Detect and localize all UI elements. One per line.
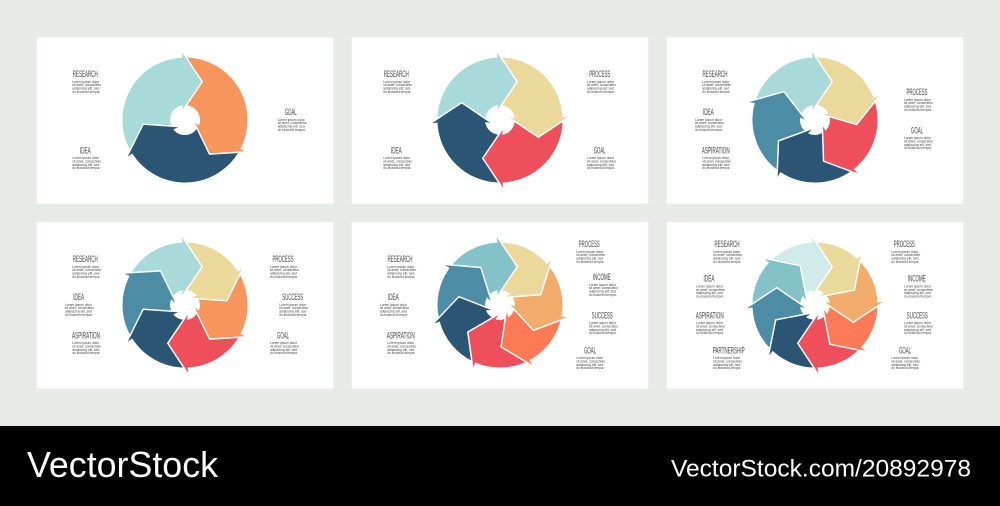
text block: research: Lorem ipsum dolor: [387, 265, 415, 269]
text block: goal: do eiusmod tempor.: [278, 128, 306, 132]
text block: aspiration: Lorem ipsum dolor: [696, 321, 724, 325]
text block: research: RESEARCH: [73, 69, 98, 79]
text block: research: do eiusmod tempor.: [383, 90, 411, 94]
text block: aspiration: ASPIRATION: [696, 310, 724, 320]
text block: process: sit amet, consectetur: [587, 83, 617, 87]
panel: six-step cycle: [37, 222, 333, 388]
text block: idea: sit amet, consectetur: [383, 160, 413, 164]
text block: success: adipiscing elit, sed: [904, 328, 931, 332]
text block: goal: adipiscing elit, sed: [270, 348, 297, 352]
text block: idea: adipiscing elit, sed: [696, 291, 723, 295]
text block: income: Lorem ipsum dolor: [589, 283, 617, 287]
text block: goal: do eiusmod tempor.: [270, 351, 298, 355]
text block: income: INCOME: [908, 274, 926, 284]
text block: aspiration: [387, 330, 417, 355]
text block: process: do eiusmod tempor.: [904, 108, 932, 112]
text block: success: do eiusmod tempor.: [279, 313, 307, 317]
text block: research: do eiusmod tempor.: [713, 260, 741, 264]
text block: aspiration: ASPIRATION: [387, 330, 415, 340]
text block: partnership: do eiusmod tempor.: [713, 366, 741, 370]
text block: process: [904, 87, 934, 112]
text block: aspiration: adipiscing elit, sed: [702, 163, 729, 167]
text block: research: sit amet, consectetur: [713, 253, 743, 257]
text block: idea: IDEA: [704, 274, 714, 284]
text block: aspiration: ASPIRATION: [72, 330, 100, 340]
text block: process: adipiscing elit, sed: [904, 104, 931, 108]
text block: goal: [587, 145, 617, 170]
text block: aspiration: do eiusmod tempor.: [702, 166, 730, 170]
text block: idea: adipiscing elit, sed: [72, 163, 99, 167]
panel: eight-step cycle: [667, 222, 963, 388]
text block: goal: adipiscing elit, sed: [904, 143, 931, 147]
text block: income: [589, 272, 619, 297]
text block: income: do eiusmod tempor.: [589, 293, 617, 297]
text block: goal: GOAL: [277, 330, 289, 340]
footer image id: VectorStock.com/20892978: [671, 456, 971, 482]
text block: aspiration: adipiscing elit, sed: [72, 348, 99, 352]
text block: process: Lorem ipsum dolor: [270, 265, 298, 269]
text block: success: SUCCESS: [592, 310, 613, 320]
text block: goal: adipiscing elit, sed: [587, 163, 614, 167]
text block: process: do eiusmod tempor.: [270, 275, 298, 279]
text block: aspiration: [696, 310, 726, 335]
text block: idea: [72, 145, 102, 170]
text block: goal: do eiusmod tempor.: [576, 366, 604, 370]
footer bar: [0, 426, 1000, 506]
text block: idea: IDEA: [391, 145, 402, 155]
text block: success: sit amet, consectetur: [589, 324, 619, 328]
text block: process: Lorem ipsum dolor: [891, 250, 919, 254]
text block: goal: Lorem ipsum dolor: [278, 118, 305, 122]
text block: aspiration: sit amet, consectetur: [72, 344, 102, 348]
text block: process: [270, 254, 300, 279]
text block: idea: [383, 145, 413, 170]
text block: process: Lorem ipsum dolor: [587, 80, 615, 84]
text block: research: [72, 254, 102, 279]
text block: aspiration: adipiscing elit, sed: [387, 348, 414, 352]
text block: goal: sit amet, consectetur: [278, 121, 307, 125]
text block: idea: Lorem ipsum dolor: [695, 118, 723, 122]
text block: aspiration: [72, 330, 102, 355]
text block: goal: sit amet, consectetur: [587, 160, 617, 164]
text block: research: [702, 69, 732, 94]
text block: success: sit amet, consectetur: [279, 306, 309, 310]
text block: goal: adipiscing elit, sed: [278, 124, 305, 128]
text block: goal: do eiusmod tempor.: [587, 166, 615, 170]
text block: research: RESEARCH: [384, 69, 409, 79]
text block: income: adipiscing elit, sed: [589, 290, 616, 294]
panel: five-step cycle: [667, 37, 963, 213]
text block: goal: Lorem ipsum dolor: [904, 136, 932, 140]
text block: aspiration: do eiusmod tempor.: [72, 351, 100, 355]
text block: income: do eiusmod tempor.: [904, 295, 932, 299]
text block: partnership: PARTNERSHIP: [713, 345, 745, 355]
text block: idea: adipiscing elit, sed: [383, 163, 410, 167]
text block: research: Lorem ipsum dolor: [383, 80, 411, 84]
text block: research: Lorem ipsum dolor: [72, 80, 100, 84]
text block: idea: Lorem ipsum dolor: [696, 285, 724, 289]
text block: success: [279, 292, 309, 317]
text block: income: [904, 274, 934, 299]
text block: goal: do eiusmod tempor.: [904, 146, 932, 150]
text block: idea: do eiusmod tempor.: [72, 166, 100, 170]
text block: goal: Lorem ipsum dolor: [891, 356, 919, 360]
text block: process: sit amet, consectetur: [904, 101, 934, 105]
text block: idea: [695, 107, 725, 132]
chart: six arrow cycle: [96, 222, 274, 388]
text block: goal: [576, 345, 606, 370]
text block: goal: sit amet, consectetur: [270, 344, 300, 348]
text block: process: adipiscing elit, sed: [576, 256, 603, 260]
text block: goal: GOAL: [285, 107, 297, 117]
text block: goal: sit amet, consectetur: [904, 140, 934, 144]
text block: process: adipiscing elit, sed: [891, 256, 918, 260]
text block: goal: [891, 345, 921, 370]
text block: process: adipiscing elit, sed: [587, 86, 614, 90]
text block: research: sit amet, consectetur: [702, 83, 732, 87]
text block: research: [72, 69, 102, 94]
text block: goal: sit amet, consectetur: [891, 360, 921, 364]
text block: income: sit amet, consectetur: [904, 288, 934, 292]
text block: goal: [904, 125, 934, 150]
text block: process: PROCESS: [589, 69, 610, 79]
text block: success: Lorem ipsum dolor: [904, 321, 932, 325]
text block: process: sit amet, consectetur: [576, 253, 606, 257]
panel: three-step cycle: [37, 37, 333, 210]
text block: aspiration: sit amet, consectetur: [387, 344, 417, 348]
text block: idea: sit amet, consectetur: [695, 121, 725, 125]
text block: income: Lorem ipsum dolor: [904, 285, 932, 289]
text block: goal: Lorem ipsum dolor: [576, 356, 604, 360]
text block: process: do eiusmod tempor.: [587, 90, 615, 94]
text block: research: RESEARCH: [73, 254, 98, 264]
text block: partnership: sit amet, consectetur: [713, 360, 743, 364]
text block: process: adipiscing elit, sed: [270, 272, 297, 276]
text block: idea: Lorem ipsum dolor: [72, 156, 100, 160]
text block: research: RESEARCH: [702, 69, 728, 79]
text block: idea: Lorem ipsum dolor: [65, 303, 93, 307]
text block: process: PROCESS: [906, 87, 928, 97]
text block: idea: do eiusmod tempor.: [380, 313, 408, 317]
text block: idea: IDEA: [703, 107, 714, 117]
text block: success: [904, 310, 934, 335]
text block: research: adipiscing elit, sed: [383, 86, 410, 90]
text block: goal: [278, 107, 307, 132]
text block: success: Lorem ipsum dolor: [589, 321, 617, 325]
text block: idea: Lorem ipsum dolor: [383, 156, 411, 160]
text block: goal: do eiusmod tempor.: [891, 366, 919, 370]
text block: idea: adipiscing elit, sed: [695, 124, 722, 128]
text block: process: sit amet, consectetur: [270, 268, 300, 272]
text block: process: PROCESS: [579, 239, 600, 249]
panel: four-step cycle: [352, 37, 648, 204]
text block: research: RESEARCH: [388, 254, 412, 264]
text block: success: SUCCESS: [907, 310, 928, 320]
text block: success: sit amet, consectetur: [904, 324, 934, 328]
text block: partnership: [713, 345, 745, 370]
text block: research: do eiusmod tempor.: [72, 275, 100, 279]
text block: idea: adipiscing elit, sed: [65, 310, 92, 314]
text block: success: do eiusmod tempor.: [589, 331, 617, 335]
text block: research: adipiscing elit, sed: [72, 272, 99, 276]
text block: income: sit amet, consectetur: [589, 286, 619, 290]
text block: research: [713, 239, 743, 264]
text block: aspiration: do eiusmod tempor.: [387, 351, 415, 355]
text block: aspiration: sit amet, consectetur: [702, 160, 732, 164]
text block: process: Lorem ipsum dolor: [576, 250, 604, 254]
text block: aspiration: Lorem ipsum dolor: [387, 341, 415, 345]
text block: research: adipiscing elit, sed: [387, 272, 414, 276]
text block: goal: sit amet, consectetur: [576, 360, 606, 364]
text block: aspiration: sit amet, consectetur: [696, 324, 726, 328]
text block: process: do eiusmod tempor.: [576, 260, 604, 264]
chart: eight arrow cycle: [734, 224, 896, 386]
text block: idea: sit amet, consectetur: [72, 160, 102, 164]
text block: idea: IDEA: [388, 292, 399, 302]
text block: research: [387, 254, 417, 279]
text block: research: Lorem ipsum dolor: [702, 80, 730, 84]
text block: idea: [65, 292, 95, 317]
text block: research: adipiscing elit, sed: [702, 86, 729, 90]
text block: success: SUCCESS: [282, 292, 303, 302]
text block: research: sit amet, consectetur: [72, 83, 102, 87]
text block: aspiration: Lorem ipsum dolor: [702, 156, 730, 160]
text block: goal: GOAL: [911, 125, 923, 135]
text block: idea: sit amet, consectetur: [65, 306, 95, 310]
text block: aspiration: adipiscing elit, sed: [696, 328, 723, 332]
chart: three arrow cycle: [115, 49, 278, 210]
text block: research: sit amet, consectetur: [387, 268, 417, 272]
text block: process: [891, 239, 921, 264]
text block: research: RESEARCH: [714, 239, 740, 249]
text block: income: INCOME: [593, 272, 611, 282]
text block: goal: GOAL: [899, 345, 911, 355]
text block: partnership: Lorem ipsum dolor: [713, 356, 741, 360]
text block: idea: do eiusmod tempor.: [695, 128, 723, 132]
text block: research: [383, 69, 413, 94]
text block: process: do eiusmod tempor.: [891, 260, 919, 264]
chart: four arrow cycle: [429, 49, 571, 191]
text block: research: Lorem ipsum dolor: [713, 250, 741, 254]
text block: idea: [380, 292, 410, 317]
text block: success: adipiscing elit, sed: [279, 310, 306, 314]
chart: seven arrow cycle: [414, 222, 580, 390]
text block: process: sit amet, consectetur: [891, 253, 921, 257]
text block: goal: Lorem ipsum dolor: [270, 341, 298, 345]
text block: goal: GOAL: [594, 145, 606, 155]
text block: research: do eiusmod tempor.: [72, 90, 100, 94]
text block: idea: IDEA: [73, 292, 84, 302]
text block: aspiration: do eiusmod tempor.: [696, 331, 724, 335]
text block: idea: do eiusmod tempor.: [696, 295, 724, 299]
text block: process: [576, 239, 606, 264]
text block: idea: adipiscing elit, sed: [380, 310, 407, 314]
text block: process: PROCESS: [272, 254, 294, 264]
text block: idea: do eiusmod tempor.: [65, 313, 93, 317]
text block: goal: adipiscing elit, sed: [576, 363, 603, 367]
text block: research: do eiusmod tempor.: [702, 90, 730, 94]
text block: idea: sit amet, consectetur: [380, 306, 410, 310]
text block: success: Lorem ipsum dolor: [279, 303, 307, 307]
text block: goal: Lorem ipsum dolor: [587, 156, 615, 160]
text block: research: do eiusmod tempor.: [387, 275, 415, 279]
text block: success: do eiusmod tempor.: [904, 331, 932, 335]
footer logo text: VectorStock: [27, 444, 219, 485]
text block: idea: sit amet, consectetur: [696, 288, 726, 292]
text block: research: Lorem ipsum dolor: [72, 265, 100, 269]
text block: aspiration: [702, 145, 732, 170]
text block: idea: Lorem ipsum dolor: [380, 303, 408, 307]
text block: partnership: adipiscing elit, sed: [713, 363, 740, 367]
text block: idea: IDEA: [80, 145, 91, 155]
text block: goal: GOAL: [584, 345, 596, 355]
text block: research: sit amet, consectetur: [383, 83, 413, 87]
panel: seven-step cycle: [352, 222, 648, 390]
text block: research: adipiscing elit, sed: [713, 256, 740, 260]
text block: research: adipiscing elit, sed: [72, 86, 99, 90]
text block: process: Lorem ipsum dolor: [904, 98, 932, 102]
text block: aspiration: Lorem ipsum dolor: [72, 341, 100, 345]
text block: research: sit amet, consectetur: [72, 268, 102, 272]
text block: success: [589, 310, 619, 335]
text block: aspiration: ASPIRATION: [702, 145, 730, 155]
text block: process: [587, 69, 617, 94]
text block: goal: [270, 330, 300, 355]
chart: five arrow cycle: [729, 41, 905, 213]
text block: idea: do eiusmod tempor.: [383, 166, 411, 170]
text block: success: adipiscing elit, sed: [589, 328, 616, 332]
text block: idea: [696, 274, 726, 299]
text block: goal: adipiscing elit, sed: [891, 363, 918, 367]
text block: process: PROCESS: [894, 239, 915, 249]
text block: income: adipiscing elit, sed: [904, 291, 931, 295]
